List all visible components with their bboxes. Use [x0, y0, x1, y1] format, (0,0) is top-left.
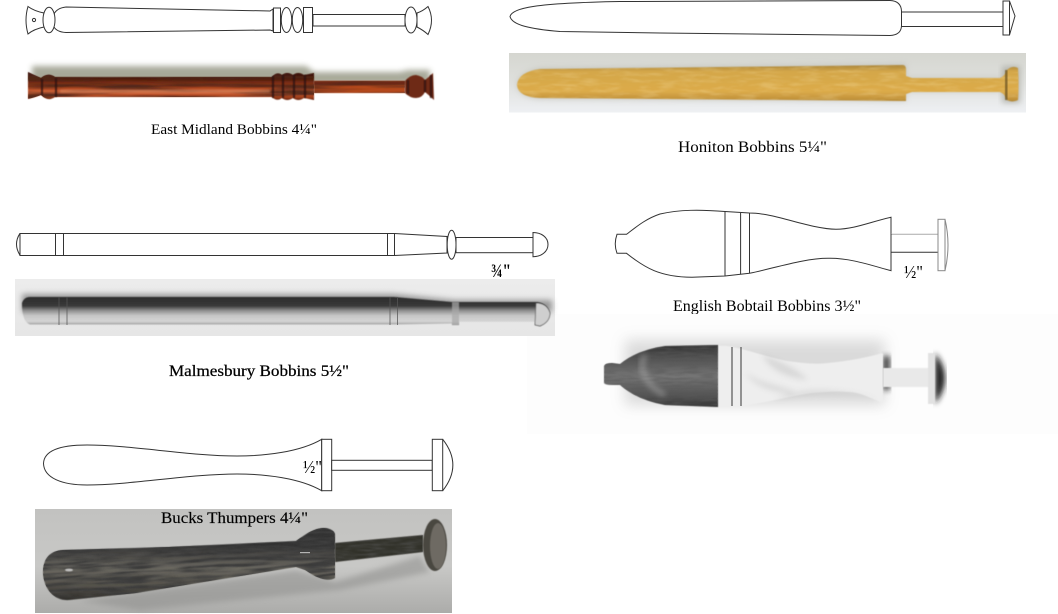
outline drawing: Honiton bobbin [510, 0, 1015, 36]
caption: Bucks Thumpers: Bucks Thumpers 4¼" [161, 510, 308, 527]
caption: Malmesbury: Malmesbury Bobbins 5½" [169, 363, 349, 380]
label: three-quarter inch: ¾" [491, 261, 511, 282]
photo: East Midland bobbin [28, 66, 434, 103]
panel: Honiton bobbin [509, 0, 1026, 156]
outline drawing: East Midland bobbin [26, 6, 432, 34]
outline drawing: Malmesbury bobbin [16, 230, 548, 259]
panel: East Midland bobbin [26, 6, 434, 138]
outline drawing: Bucks Thumper [44, 439, 453, 491]
photo: Malmesbury bobbin [15, 279, 555, 336]
caption: East Midland: East Midland Bobbins 4¼" [151, 122, 317, 138]
photo: Honiton bobbin [509, 53, 1026, 112]
outline drawing: English Bobtail bobbin [615, 210, 948, 277]
panel: Bucks Thumper bobbin [28, 439, 453, 614]
photo: English Bobtail bobbin [603, 314, 947, 411]
label: half inch: ½" [303, 457, 322, 477]
caption: English Bobtail: English Bobtail Bobbins 3½" [673, 298, 861, 315]
photo: Bucks Thumper [28, 509, 452, 614]
panel: English Bobtail bobbin [603, 210, 948, 411]
panel: Malmesbury bobbin [15, 230, 555, 380]
label: half inch: ½" [904, 262, 923, 282]
caption: Honiton: Honiton Bobbins 5¼" [678, 139, 827, 156]
